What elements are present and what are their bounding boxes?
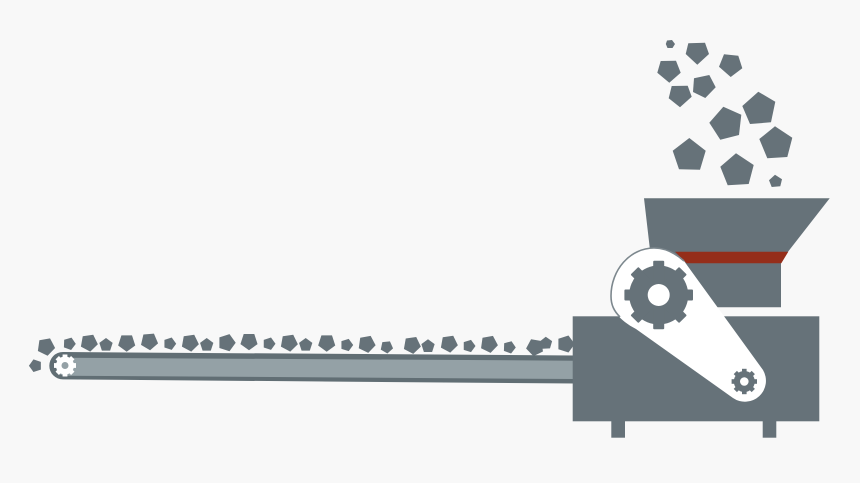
large gear bbox=[624, 261, 693, 329]
red band on hopper bbox=[675, 252, 788, 263]
small gear bbox=[732, 369, 757, 394]
rocks on conveyor bbox=[29, 333, 575, 372]
conveyor pulley gear bbox=[54, 354, 76, 376]
conveyor belt bbox=[49, 352, 575, 384]
right leg bbox=[763, 421, 776, 438]
drive arm housing bbox=[611, 248, 766, 402]
crusher body bbox=[573, 316, 819, 421]
left leg bbox=[611, 421, 625, 438]
hopper bbox=[644, 198, 830, 307]
falling rocks above hopper bbox=[657, 40, 792, 187]
